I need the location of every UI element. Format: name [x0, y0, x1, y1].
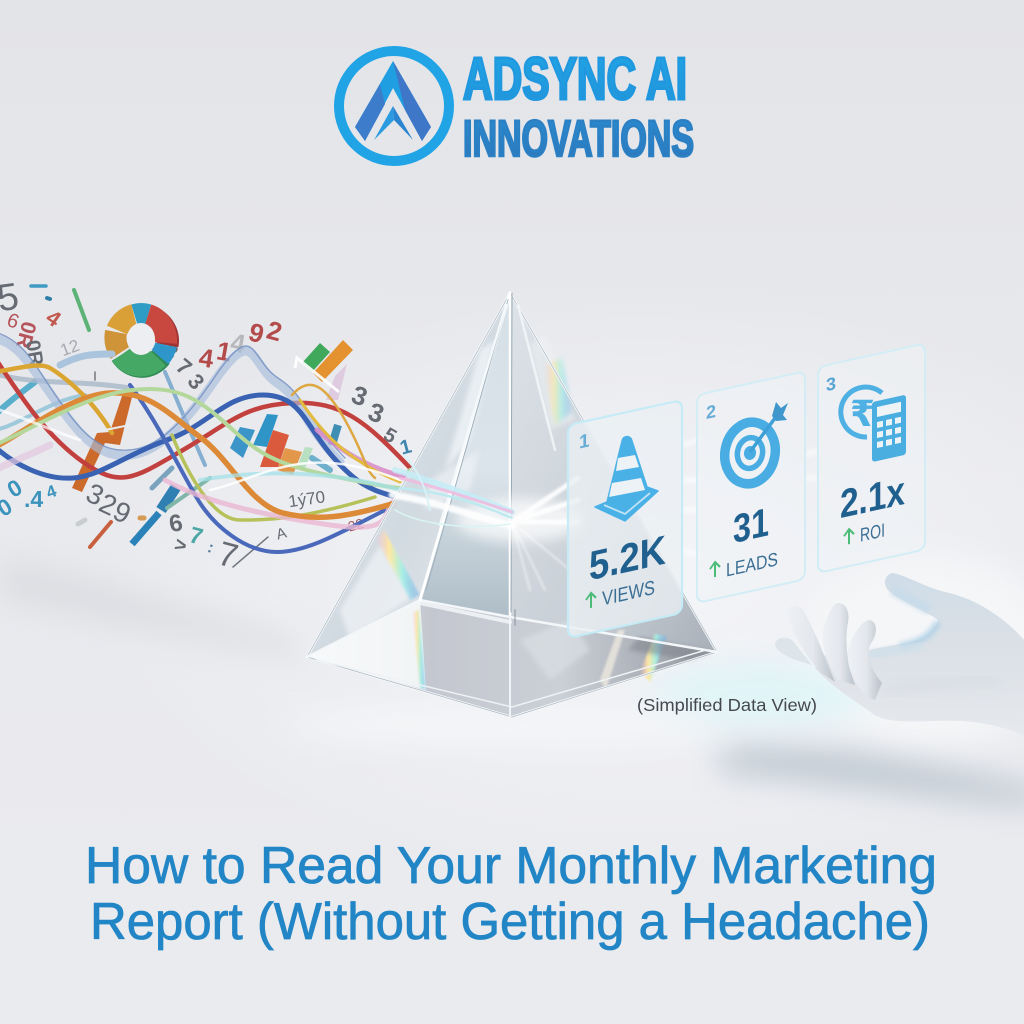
- logo: [339, 46, 694, 167]
- flowing ribbon lines: [0, 332, 416, 552]
- metric card 1: views: [568, 400, 682, 638]
- logo chevron mark: [355, 61, 431, 141]
- main title: [85, 837, 937, 951]
- scattered numbers: 0: [2, 474, 27, 503]
- metric label: VIEWS: [602, 577, 655, 610]
- scattered numbers: A: [274, 524, 289, 543]
- card panel: [818, 343, 925, 573]
- up arrow: [710, 561, 720, 578]
- chaotic data stream: [0, 276, 416, 576]
- scattered numbers: :: [205, 539, 216, 557]
- logo ring: [339, 51, 449, 161]
- scattered numbers: 2: [264, 315, 285, 347]
- card panel: [568, 400, 682, 638]
- scattered numbers: 8: [159, 338, 183, 365]
- hand: [775, 573, 1024, 735]
- icon: calculator: [872, 395, 906, 462]
- scattered numbers: 7: [187, 521, 206, 550]
- scattered numbers: 6: [4, 309, 22, 334]
- title line 1: How to Read Your Monthly Marketing: [85, 837, 937, 895]
- metric value: 2.1x: [840, 467, 905, 527]
- scattered numbers: 4: [44, 481, 60, 502]
- bar chart fragments: [72, 340, 353, 492]
- prism light beams: [392, 455, 584, 590]
- scattered numbers: 3: [364, 396, 388, 429]
- prism left face: [307, 293, 510, 657]
- metric label: LEADS: [726, 549, 778, 582]
- palm shading: [870, 590, 1010, 735]
- scattered numbers: 4: [197, 342, 216, 374]
- scattered numbers: 22: [346, 515, 366, 535]
- palm and thumb: [815, 573, 1024, 735]
- scattered numbers: 0R: [11, 319, 40, 351]
- prism right face: [510, 293, 717, 652]
- scattered numbers: 3: [81, 477, 109, 512]
- prism base: [307, 600, 717, 717]
- stray dashes: [31, 286, 338, 567]
- icon: target with arrow: [719, 402, 788, 489]
- scattered numbers: 1ý70: [287, 487, 326, 511]
- scattered numbers: 5: [379, 424, 400, 448]
- step number: 1: [579, 430, 590, 454]
- donut chart: [115, 314, 168, 367]
- metric card 3: ROI: [818, 343, 925, 573]
- scattered numbers: 1: [214, 335, 234, 367]
- scattered numbers: .4: [24, 486, 43, 512]
- scattered numbers: 6: [167, 509, 185, 538]
- scattered numbers: 1: [398, 435, 414, 460]
- icon: rupee coin: [841, 387, 882, 437]
- scattered numbers: 3: [183, 369, 210, 394]
- step number: 3: [826, 373, 836, 395]
- scattered numbers: 4: [41, 304, 66, 332]
- title line 2: Report (Without Getting a Headache): [90, 893, 930, 951]
- up arrow: [844, 528, 854, 545]
- step number: 2: [706, 401, 716, 423]
- logo wordmark line 1: ADSYNC AI: [463, 46, 687, 112]
- metric value: 5.2K: [589, 526, 666, 589]
- scattered numbers: [0, 276, 414, 576]
- caption: (Simplified Data View): [637, 695, 817, 715]
- scattered numbers: 9: [246, 317, 267, 349]
- fingers: [775, 603, 882, 700]
- scattered numbers: 12: [58, 336, 82, 360]
- prism highlights: [340, 335, 712, 690]
- prism centre face: [420, 293, 510, 617]
- scattered numbers: 3: [348, 379, 372, 412]
- logo wordmark line 2: INNOVATIONS: [463, 110, 694, 167]
- prism edges: [307, 293, 717, 717]
- glass prism: [307, 293, 717, 717]
- scattered numbers: >: [172, 534, 189, 558]
- scattered numbers: 2: [94, 487, 122, 522]
- scattered numbers: 7: [214, 535, 242, 576]
- icon: rupee coin: ₹: [850, 393, 875, 434]
- beams between cards: [682, 440, 820, 555]
- metric card 2: leads: [697, 371, 805, 603]
- scattered numbers: 4: [228, 327, 248, 359]
- metric label: ROI: [860, 520, 885, 547]
- icon: traffic cone: [595, 436, 658, 521]
- up arrow: [586, 592, 596, 609]
- card panel: [697, 371, 805, 603]
- metric value: 31: [733, 499, 769, 552]
- scattered numbers: 9: [108, 495, 136, 530]
- scattered numbers: 7: [171, 353, 197, 380]
- scattered numbers: 0R: [21, 338, 47, 368]
